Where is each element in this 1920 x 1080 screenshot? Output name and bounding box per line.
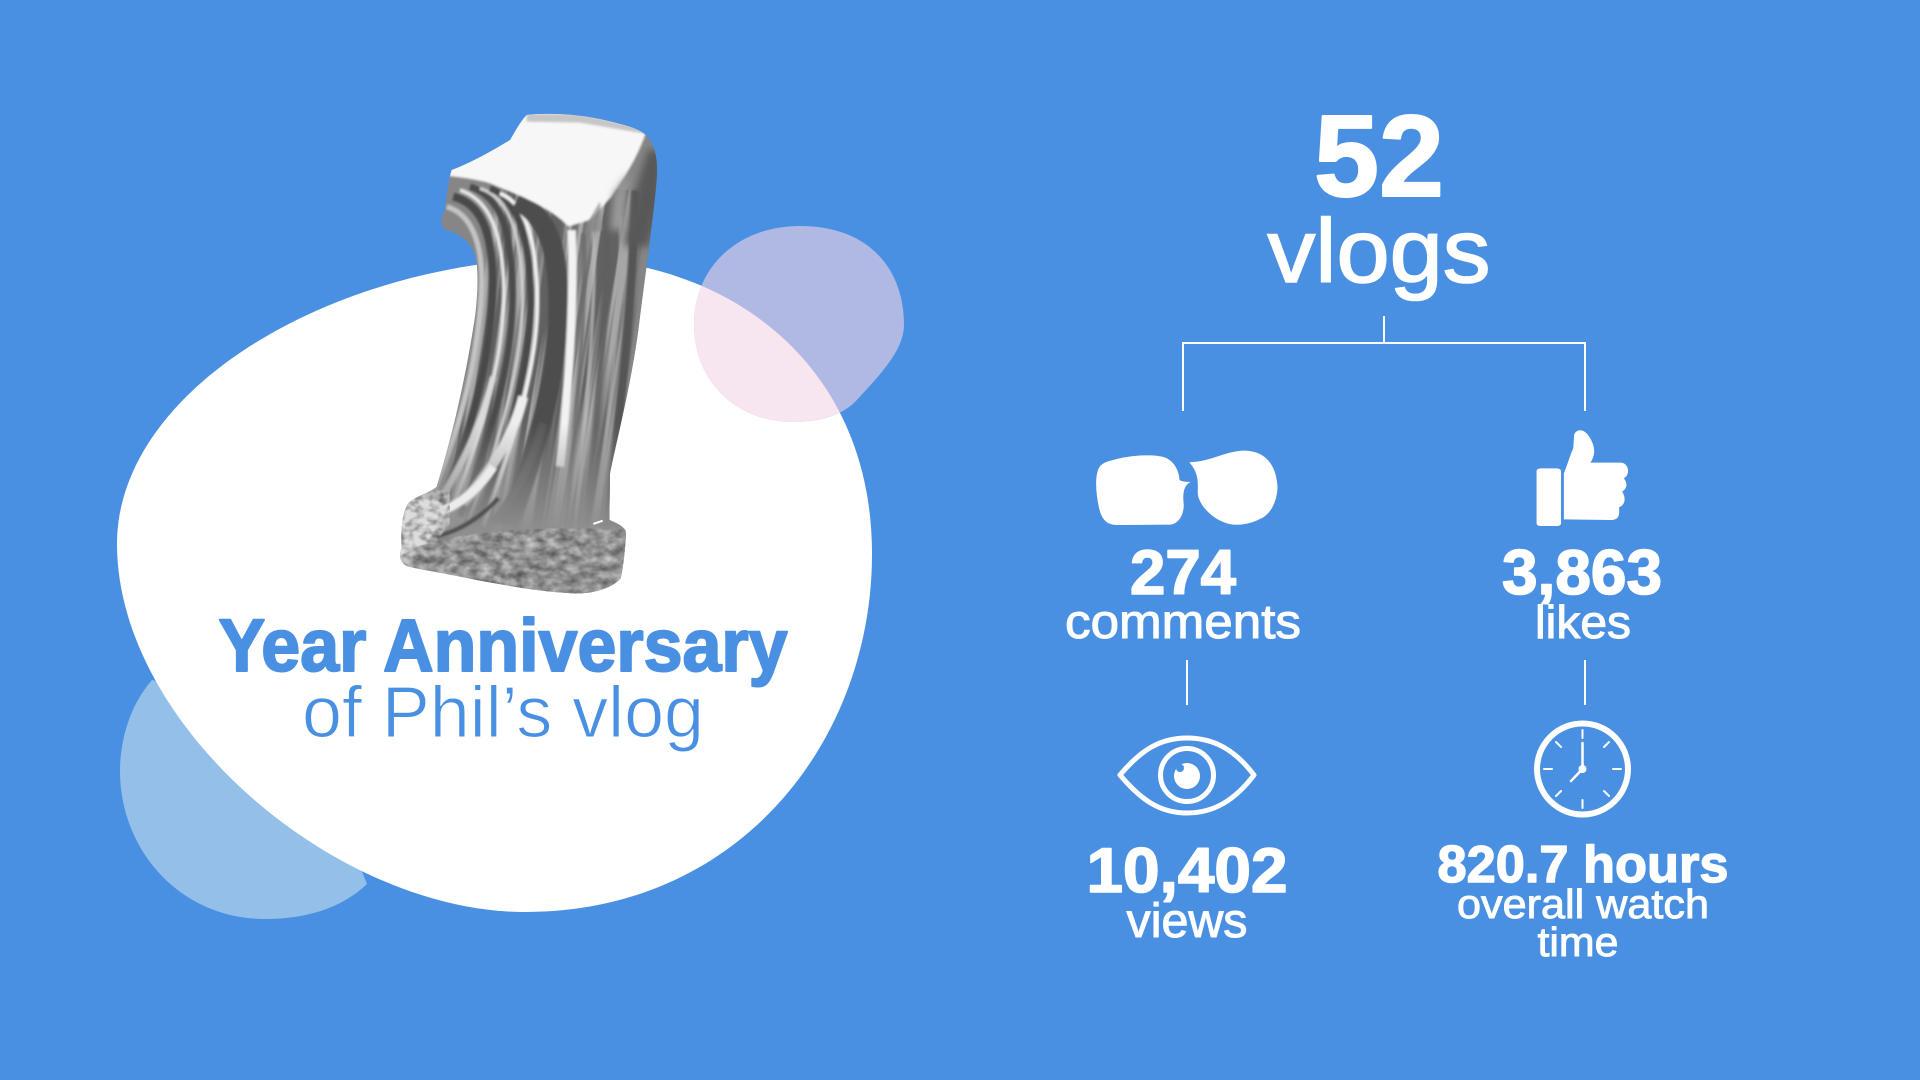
lower fade of numeral: [401, 432, 626, 536]
stat: 3,863 likes: 3,863: [1502, 538, 1662, 608]
stat: 10,402 views: [1086, 836, 1288, 948]
subtitle: of Phil's vlog: of Phil’s vlog: [302, 673, 704, 753]
icon: clock: [1537, 724, 1628, 814]
white blob: [117, 258, 872, 912]
icon: comment bubbles: [1096, 451, 1277, 525]
icon: thumbs up: [1537, 430, 1628, 526]
base of numeral: [400, 531, 626, 594]
stat: 820.7 hours overall watch time: time: [1538, 919, 1618, 965]
top highlight of numeral: [448, 110, 647, 227]
stat: 820.7 hours overall watch time: [1438, 836, 1728, 965]
stat: 10,402 views: views: [1126, 895, 1248, 948]
silver balloon numeral 1: [400, 114, 658, 594]
title line: Year Anniversary: Year Anniversary: [218, 604, 788, 687]
pale blue blob: [120, 680, 367, 919]
stat: 10,402 views: 10,402: [1086, 836, 1288, 906]
connector lines: [1183, 316, 1585, 705]
stat: 3,863 likes: [1502, 538, 1662, 648]
headline stat: 52 vlogs: vlogs: [1268, 202, 1490, 302]
stat: 274 comments: 274: [1130, 538, 1236, 608]
stat: 820.7 hours overall watch time: overall watch: [1457, 881, 1709, 927]
lavender blob: [694, 226, 904, 422]
icon: eye: [1120, 738, 1254, 813]
headline stat: 52 vlogs: 52: [1314, 91, 1444, 221]
headline stat: 52 vlogs: [1268, 91, 1490, 302]
title: [218, 604, 788, 753]
stat: 3,863 likes: likes: [1535, 596, 1631, 648]
stat: 274 comments: [1065, 538, 1301, 649]
stat: 274 comments: comments: [1065, 596, 1301, 649]
stat: 820.7 hours overall watch time: 820.7 hours: [1438, 836, 1728, 894]
